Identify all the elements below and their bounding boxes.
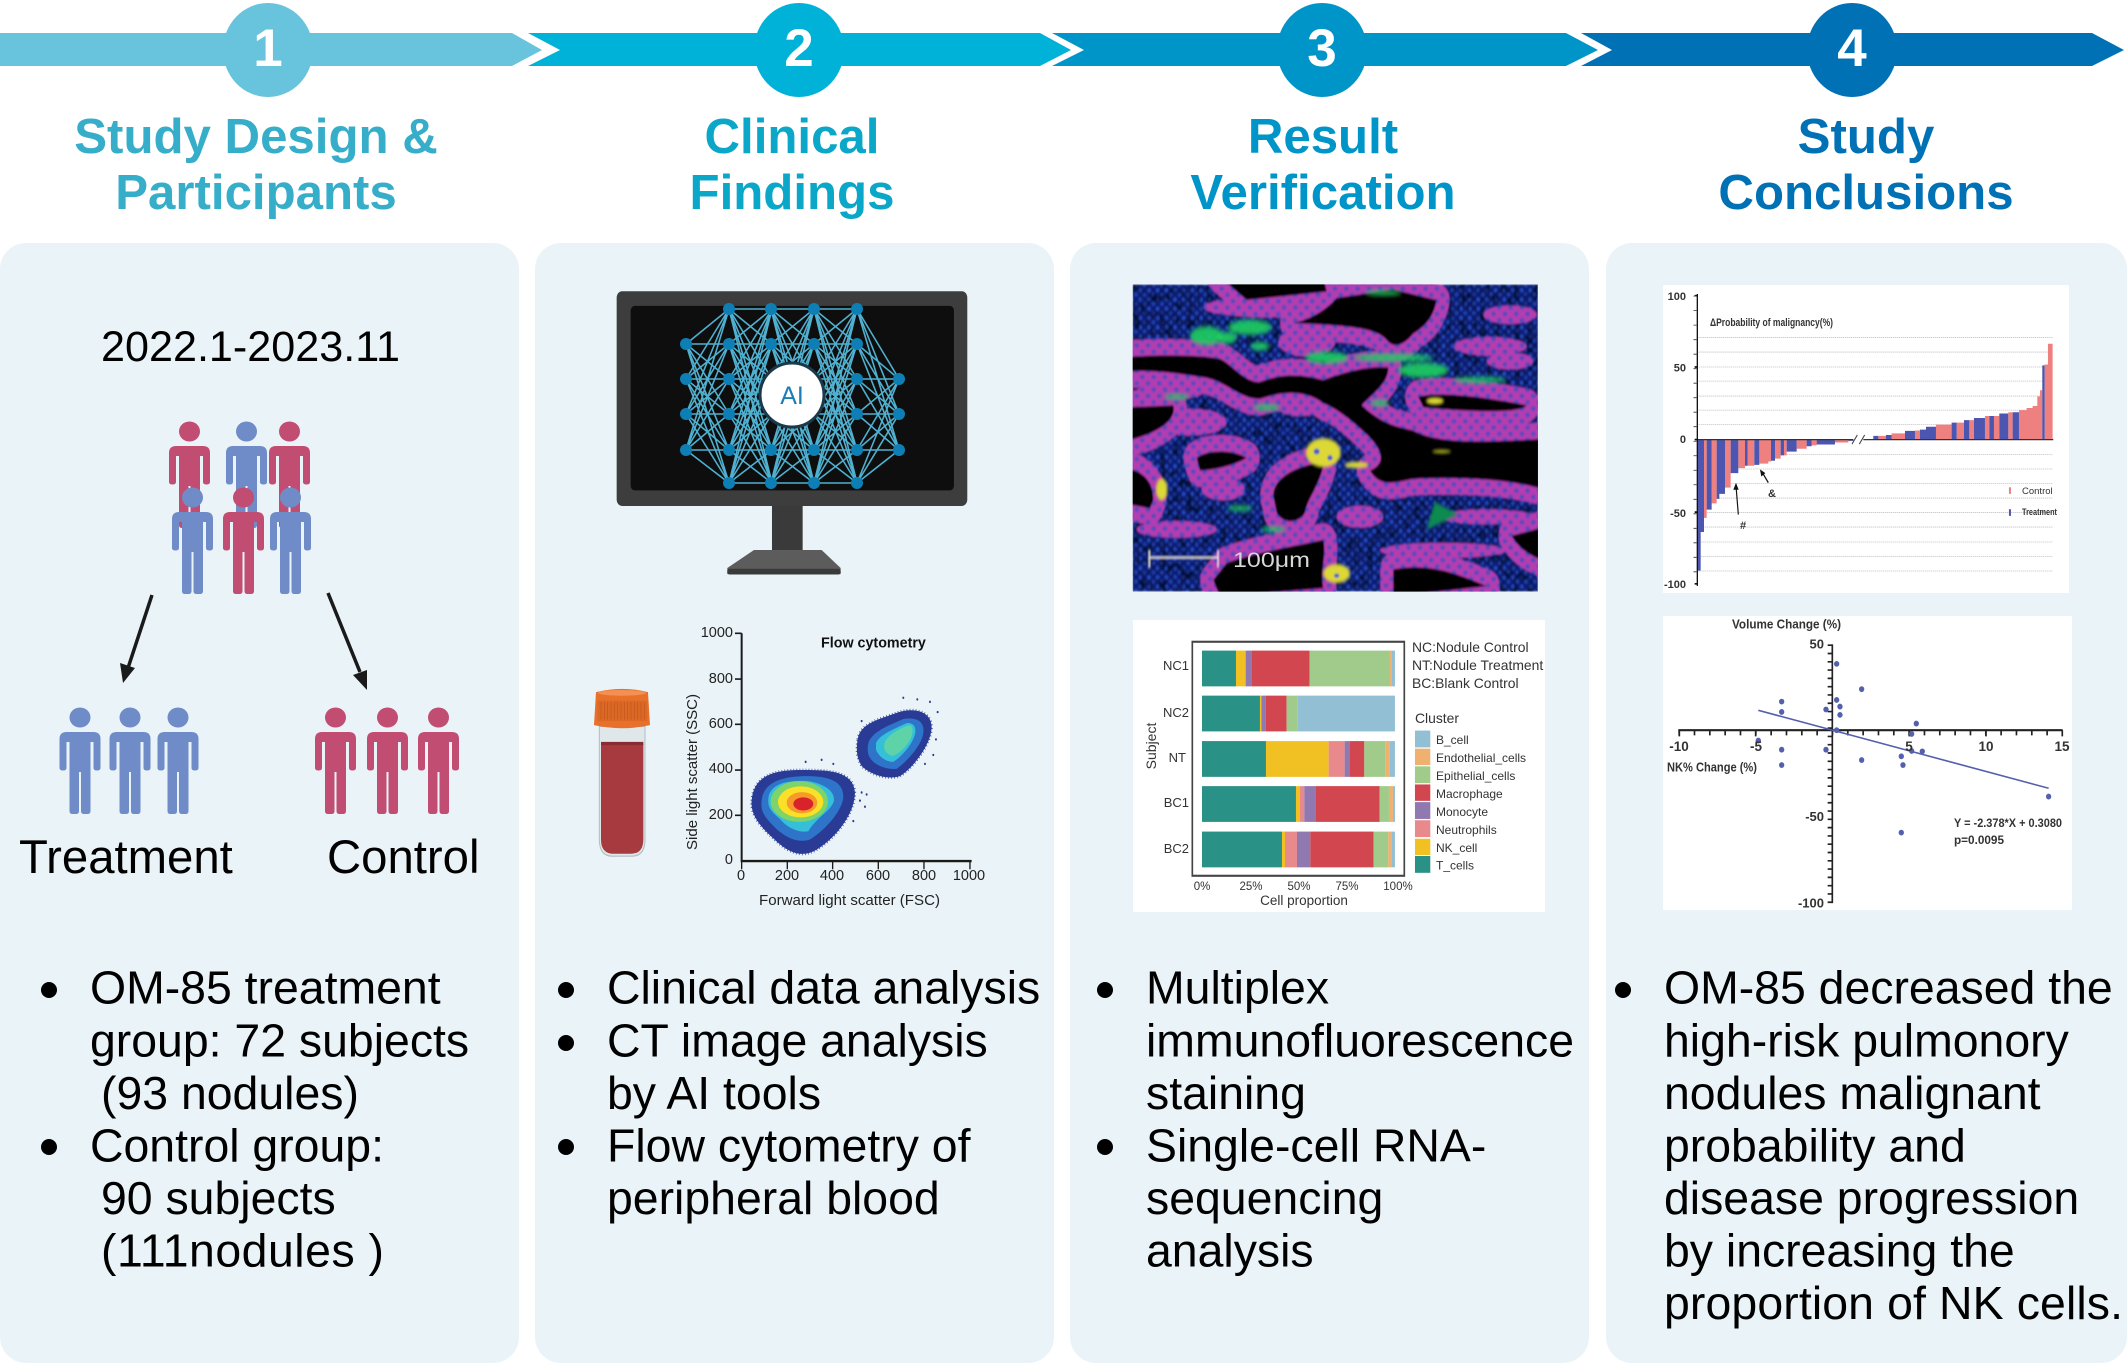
bullet text: study design: Control group: (90, 1120, 384, 1172)
bullet text: clinical findings: Clinical data analysis (607, 962, 1040, 1014)
chart: stacked cell proportion bars: NC:Nodule Control (1412, 639, 1529, 655)
bullet text: study design: 90 subjects (101, 1172, 336, 1224)
chart: stacked cell proportion bars: Cluster (1415, 710, 1459, 726)
chart: stacked cell proportion bars: 0% (1194, 881, 1210, 893)
chart: waterfall probability of malignancy: Control (2022, 486, 2053, 497)
multiplex immunofluorescence image: 100μm (1233, 549, 1310, 572)
label: treatment: Treatment (19, 831, 233, 884)
heading 2: Findings (690, 165, 894, 220)
arrow to control (328, 593, 367, 690)
bullet text: result verification: immunofluorescence (1146, 1015, 1574, 1067)
arrow 3 (1052, 33, 1598, 66)
chart: flow cytometry scatter: Side light scatter (SSC) (685, 694, 701, 850)
bullet text: study design: OM-85 treatment (90, 962, 441, 1014)
bullet text: study design: group: 72 subjects (90, 1015, 469, 1067)
chart: stacked cell proportion bars: B_cell (1436, 733, 1469, 747)
bullet text: result verification: analysis (1146, 1225, 1314, 1277)
chart: waterfall probability of malignancy: 100 (1668, 291, 1686, 303)
chart: stacked cell proportion bars: BC1 (1164, 795, 1189, 810)
chart: stacked cell proportion bars: 25% (1239, 881, 1263, 893)
bullet text: result verification (1097, 962, 1574, 1277)
heading 1 (74, 109, 438, 220)
chart: stacked cell proportion bars: Neutrophils (1436, 823, 1497, 837)
bullet text: study design (41, 962, 469, 1277)
panel: clinical findings (535, 243, 1054, 1363)
panel: study conclusions (1606, 243, 2127, 1363)
chart: waterfall probability of malignancy (1663, 285, 2069, 593)
bullet text: result verification: sequencing (1146, 1172, 1383, 1224)
icon: treatment group (60, 708, 198, 814)
bullet text: clinical findings: by AI tools (607, 1067, 821, 1119)
chart: flow cytometry scatter: 800 (709, 671, 733, 687)
bullet text: study conclusions: proportion of NK cells. (1664, 1277, 2123, 1329)
heading 1: Participants (115, 165, 397, 220)
chart: waterfall probability of malignancy: # (1740, 520, 1746, 532)
chart: stacked cell proportion bars: BC:Blank Control (1412, 675, 1519, 691)
chart: NK change versus volume change scatter: -100 (1798, 896, 1824, 910)
bullet text: study design: (93 nodules) (101, 1067, 359, 1119)
chart: stacked cell proportion bars (1133, 620, 1545, 912)
control bars (1704, 344, 2053, 518)
icon: AI monitor (617, 291, 967, 575)
chart: stacked cell proportion bars: Subject (1143, 723, 1159, 769)
bullet text: study conclusions: by increasing the (1664, 1225, 2015, 1277)
neural network (686, 309, 899, 483)
step badge 1 (223, 3, 313, 97)
chart: waterfall probability of malignancy: 50 (1674, 362, 1686, 374)
bullet text: study conclusions (1615, 962, 2123, 1329)
bullet text: clinical findings: CT image analysis (607, 1015, 988, 1067)
bullet text: result verification: staining (1146, 1067, 1306, 1119)
chart: stacked cell proportion bars: BC2 (1164, 841, 1189, 856)
chart: flow cytometry scatter: Flow cytometry (821, 636, 926, 652)
step badge 2: 2 (784, 19, 814, 78)
header: process arrows (0, 33, 2124, 66)
bullet text: result verification: Multiplex (1146, 962, 1329, 1014)
chart: NK change versus volume change scatter: Y = -2.378*X + 0.3080 (1954, 818, 2062, 830)
chart: NK change versus volume change scatter: -10 (1669, 739, 1689, 754)
chart: stacked cell proportion bars: Endothelial_cells (1436, 751, 1526, 765)
chart: stacked cell proportion bars: 75% (1335, 881, 1359, 893)
heading 4 (1718, 109, 2014, 220)
arrow 2 (528, 33, 1071, 66)
date range: 2022.1-2023.11 (101, 324, 400, 371)
chart: flow cytometry scatter: 200 (709, 807, 733, 823)
chart: stacked cell proportion bars: Monocyte (1436, 805, 1488, 819)
bullet text: study conclusions: nodules malignant (1664, 1067, 2041, 1119)
icon: control group (315, 708, 459, 814)
heading 1: Study Design & (74, 109, 438, 164)
bullet text: study conclusions: high-risk pulmonory (1664, 1015, 2070, 1067)
chart: NK change versus volume change scatter: 10 (1978, 739, 1994, 754)
chart: waterfall probability of malignancy: ΔProbability of malignancy(%) (1710, 317, 1833, 329)
step badge 2 (754, 3, 844, 97)
chart: NK change versus volume change scatter: NK% Change (%) (1667, 760, 1757, 774)
bullet text: study conclusions: OM-85 decreased the (1664, 962, 2113, 1014)
chart: NK change versus volume change scatter (1663, 616, 2072, 910)
chart: stacked cell proportion bars: 50% (1287, 881, 1311, 893)
chart: stacked cell proportion bars: Cell proportion (1260, 893, 1348, 908)
heading 3: Verification (1190, 165, 1456, 220)
arrow to treatment (120, 595, 152, 683)
chart: stacked cell proportion bars: Macrophage (1436, 787, 1503, 801)
label: control: Control (327, 831, 479, 884)
treatment bars (1697, 365, 2045, 571)
chart: flow cytometry scatter: 1000 (953, 868, 985, 884)
chart: stacked cell proportion bars: T_cells (1436, 858, 1474, 872)
bullet text: study conclusions: probability and (1664, 1120, 1966, 1172)
chart: NK change versus volume change scatter: -5 (1750, 739, 1762, 754)
bullet text: clinical findings: peripheral blood (607, 1172, 940, 1224)
chart: NK change versus volume change scatter: 15 (2054, 739, 2070, 754)
icon: AI monitor: AI (780, 382, 804, 410)
chart: waterfall probability of malignancy: Treatment (2022, 507, 2058, 518)
chart: flow cytometry scatter: 800 (912, 868, 936, 884)
chart: flow cytometry scatter: 0 (737, 868, 745, 884)
chart: stacked cell proportion bars: NC1 (1163, 658, 1189, 673)
chart: flow cytometry scatter: 400 (820, 868, 844, 884)
chart: flow cytometry scatter: 200 (775, 868, 799, 884)
arrow 4 (1581, 33, 2124, 66)
step badge 4: 4 (1837, 19, 1867, 78)
icon: blood tube (594, 689, 650, 856)
chart: flow cytometry scatter: 400 (709, 761, 733, 777)
multiplex immunofluorescence image (1127, 277, 1543, 597)
chart: flow cytometry scatter: 0 (725, 852, 733, 868)
chart: waterfall probability of malignancy: -100 (1664, 579, 1686, 591)
icon: mixed participants group (169, 422, 311, 594)
chart: stacked cell proportion bars: NT (1169, 750, 1186, 765)
bullet text: clinical findings: Flow cytometry of (607, 1120, 971, 1172)
bullet text: study conclusions: disease progression (1664, 1172, 2079, 1224)
chart: NK change versus volume change scatter: 5 (1905, 739, 1913, 754)
chart: waterfall probability of malignancy: & (1768, 488, 1776, 500)
chart: NK change versus volume change scatter: 50 (1810, 636, 1824, 652)
step badge 1: 1 (253, 19, 283, 78)
panel: result verification (1070, 243, 1589, 1363)
heading 3: Result (1248, 109, 1398, 164)
heading 2 (690, 109, 894, 220)
chart: stacked cell proportion bars: NK_cell (1436, 841, 1477, 855)
heading 4: Conclusions (1718, 165, 2014, 220)
heading 3 (1190, 109, 1456, 220)
chart: NK change versus volume change scatter: p=0.0095 (1954, 835, 2005, 847)
arrow 1 (0, 33, 542, 66)
heading 4: Study (1798, 109, 1935, 164)
chart: stacked cell proportion bars: NC2 (1163, 705, 1189, 720)
chart: flow cytometry scatter: Forward light scatter (FSC) (759, 893, 940, 909)
bullet text: clinical findings (558, 962, 1040, 1224)
chart: stacked cell proportion bars: Epithelial_cells (1436, 769, 1515, 783)
heading 2: Clinical (705, 109, 879, 164)
chart: flow cytometry scatter: 1000 (701, 625, 733, 641)
step badge 3: 3 (1307, 19, 1337, 78)
chart: NK change versus volume change scatter: Volume Change (%) (1732, 618, 1841, 632)
chart: waterfall probability of malignancy: -50 (1670, 508, 1686, 520)
bullet text: result verification: Single-cell RNA- (1146, 1120, 1486, 1172)
chart: waterfall probability of malignancy: 0 (1680, 434, 1686, 446)
chart: flow cytometry scatter: 600 (709, 716, 733, 732)
bullet text: study design: (111nodules ) (101, 1225, 384, 1277)
chart: flow cytometry scatter (685, 625, 985, 909)
chart: stacked cell proportion bars: 100% (1383, 881, 1413, 893)
chart: NK change versus volume change scatter: -50 (1805, 809, 1824, 824)
step badge 4 (1807, 3, 1897, 97)
step badge 3 (1277, 3, 1367, 97)
chart: flow cytometry scatter: 600 (866, 868, 890, 884)
panel: study design (0, 243, 519, 1363)
chart: stacked cell proportion bars: NT:Nodule Treatment (1412, 657, 1543, 673)
